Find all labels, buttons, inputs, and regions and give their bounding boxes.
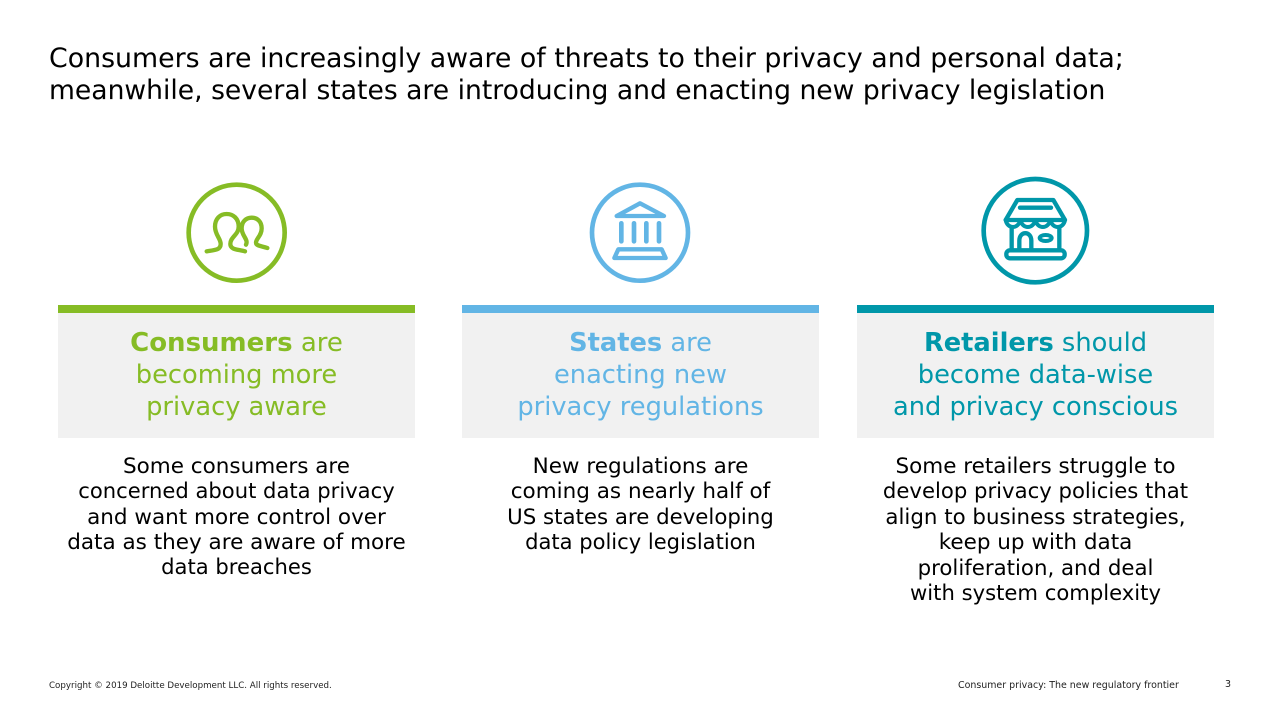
body text: [883, 454, 1188, 605]
body text: coming as nearly half of: [511, 479, 770, 504]
body text: New regulations are: [533, 454, 748, 479]
heading box: become data-wise: [918, 360, 1153, 390]
heading box: Consumers are: [130, 328, 343, 358]
body text: data as they are aware of more: [67, 530, 406, 555]
body text: align to business strategies,: [885, 505, 1186, 530]
body text: Some consumers are: [123, 454, 350, 479]
heading box: [58, 313, 415, 438]
heading box: privacy aware: [146, 392, 327, 422]
footer: copyright: Copyright © 2019 Deloitte Development LLC. All rights reserved.: [49, 681, 332, 691]
body text: data breaches: [161, 554, 312, 579]
accent bar: [857, 305, 1214, 313]
title: meanwhile, several states are introducing and enacting new privacy legislation: [49, 75, 1105, 106]
body text: and want more control over: [87, 505, 386, 530]
body text: data policy legislation: [525, 529, 756, 554]
panel: consumers: [58, 305, 415, 579]
panel: retailers: [857, 305, 1214, 605]
footer: page number: 3: [1225, 679, 1231, 690]
heading box: [857, 313, 1214, 438]
heading box: enacting new: [554, 360, 727, 390]
heading box: Retailers should: [924, 328, 1147, 358]
body text: with system complexity: [910, 580, 1161, 605]
icon: states: [590, 182, 690, 283]
body text: develop privacy policies that: [883, 478, 1188, 503]
body text: [507, 454, 774, 554]
icon: retailers: [981, 176, 1090, 285]
icon: consumers: [186, 182, 287, 283]
title: Consumers are increasingly aware of threats to their privacy and personal data;: [49, 43, 1124, 74]
heading box: becoming more: [136, 360, 337, 390]
body text: concerned about data privacy: [78, 478, 395, 503]
panel: states: [462, 305, 819, 554]
accent bar: [58, 305, 415, 313]
body text: keep up with data: [939, 530, 1132, 555]
footer: document title: Consumer privacy: The new regulatory frontier: [958, 680, 1179, 691]
title: [49, 43, 1124, 106]
heading box: and privacy conscious: [893, 392, 1178, 422]
body text: Some retailers struggle to: [895, 454, 1176, 479]
heading box: privacy regulations: [517, 392, 764, 422]
body text: proliferation, and deal: [918, 556, 1153, 581]
heading box: States are: [569, 328, 712, 358]
body text: [67, 454, 406, 579]
accent bar: [462, 305, 819, 313]
body text: US states are developing: [507, 505, 774, 530]
heading box: [462, 313, 819, 438]
